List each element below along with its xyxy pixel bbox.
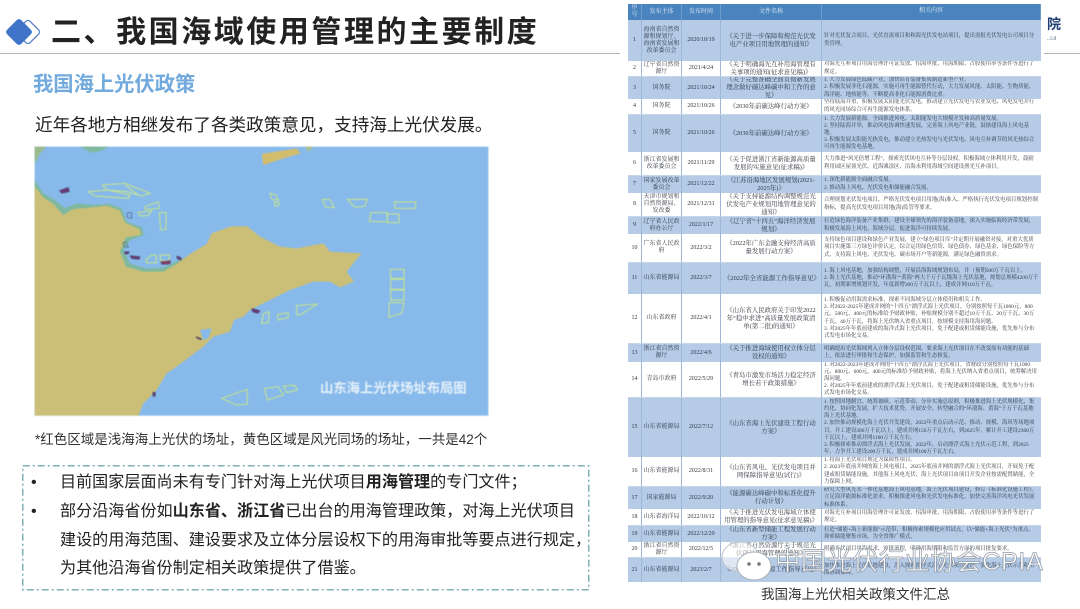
row 9: 《辽宁省“十四五”海洋经济发展规划》 <box>727 218 815 232</box>
row 16: 2022/8/31 <box>689 468 713 474</box>
row 9: 2022/1/17 <box>689 222 713 228</box>
table header: 发布时间 <box>689 8 713 14</box>
cropped small text top right: ..l.il <box>1047 36 1056 42</box>
section heading: 我国海上光伏政策 <box>33 74 195 96</box>
row 13: 2022/4/6 <box>690 350 712 356</box>
row 21: 山东省能源局 <box>643 566 680 572</box>
row 21 <box>628 558 1041 582</box>
bullet 1: • <box>31 473 37 491</box>
row 6: 《关于促进浙江省新能源高质量发展的实施意见(征求稿)》 <box>726 156 816 170</box>
header divider <box>0 53 620 54</box>
row 21: 21 <box>632 566 638 572</box>
row 7: 7 <box>633 181 636 187</box>
row 3: 2021/10/24 <box>687 84 715 90</box>
wechat watermark icon <box>722 542 772 580</box>
row 18: 18 <box>632 514 638 520</box>
row 5: 2. 坚持陆海并举，推动风电协调快速发展，完善海上风电产业链，鼓励建设海上风电基地。 <box>824 123 1029 136</box>
row 14: 2. 对2025年年底前建成的漂浮式海上光伏项目，免于配建或租赁储能设施，优先参与分布式发电市场化交易。 <box>824 383 1034 396</box>
row 7: 1. 深化新能源全面融合发展。 <box>824 177 894 183</box>
row 2: 对海光互补项目用海管理许可证发放、招海审批、用海期限、占股使用率等条件等进行了规定。 <box>824 61 1034 74</box>
row 14: 《青岛市激发市场活力稳定经济增长若干政策措施》 <box>726 372 816 386</box>
row 20: 浙江省自然资源厅 <box>643 542 680 556</box>
row 1 <box>628 20 1041 61</box>
table header: 文件名称 <box>759 9 783 15</box>
policy table <box>628 4 1041 582</box>
row 11: 2. 海上光伏基地，推动“环渤海”“黄海”两大千万千瓦级海上光伏基地，规划总规模4200万千瓦，初期新增规划开发，年度新增300万千瓦以上，建成并网110万千瓦。 <box>824 275 1038 288</box>
row 11: 11 <box>632 275 637 281</box>
row 15 <box>628 398 1041 457</box>
row 1: 海南省自然资源和规划厅、海南省发展和改革委员会 <box>643 26 680 54</box>
row 2: 2 <box>633 65 636 71</box>
red shallow-sea site markers <box>59 187 260 396</box>
row 16: 1. 将海上光伏项目规定为保障性项目。 <box>824 457 916 463</box>
row 4: 2021/10/26 <box>687 103 715 109</box>
row 8: 《关于支持能源结构调整规范光伏发电产业规划用地管理意见的通知》 <box>726 193 816 216</box>
row 12: 2. 对2022-2025年建成并网的“十四五”漂浮式海上光伏项目，分别按照每千瓦1000元、800元、500元、400元的标准给予财政补贴，补贴规模分别不超过10万千瓦、20万千瓦、30万千瓦、40万千瓦，将海上光伏纳入省重点项目，按规模支持海用海问题。 <box>824 304 1034 324</box>
row 18 <box>628 509 1041 526</box>
row 1: 《关于进一步保障和规范光伏发电产业项目用地管理的通知》 <box>726 32 816 48</box>
row 13: 明确提出光伏海域列入立体分层设权范围，要求海上光伏项目在不改变原有功能的基础上，依法进行审批和生态保护，加强监管和生态修复。 <box>824 346 1029 359</box>
row 14: 青岛市政府 <box>646 376 676 382</box>
row 4 <box>628 99 1041 115</box>
row 14: 2022/5/29 <box>689 376 713 382</box>
table header: 序号 <box>631 5 638 18</box>
header icon: double diamonds <box>6 19 40 45</box>
row 20: 明确光伏项目用海需求、审批流程，明确用海期限和监管方面的项目批复要求。 <box>824 546 1013 552</box>
row 15: 《山东省海上光伏建设工程行动方案》 <box>726 420 816 434</box>
row 19: 《山东省新型储能工程发展行动方案》 <box>726 526 816 541</box>
map label: 山东海上光伏场址布局图 <box>320 379 467 395</box>
row 4: 坚持陆海并重，积极发展太阳能光伏发电，推动建立光伏发电与农业发电、风电发电并行的风光同场综合可再生能源发电体系。 <box>824 99 1034 112</box>
row 5: 《2030年前碳达峰行动方案》 <box>729 130 813 136</box>
row 8: 2021/12/31 <box>687 201 715 207</box>
row 15: 3. 积极探索推动漂浮式海上光伏发展，2022年，启动漂浮式海上光伏示范工程，到2025年，力争开工建设200万千瓦，建成并网100万千瓦左右。 <box>824 442 1029 455</box>
row 17: 国家能源局 <box>646 494 676 500</box>
row 12: 《山东省人民政府关于印发2022年“稳中求进”高质量发展政策清单(第二批)的通知》 <box>726 306 816 330</box>
intro text: 近年各地方相继发布了各类政策意见，支持海上光伏发展。 <box>35 115 492 135</box>
row 6: 6 <box>633 160 636 166</box>
row 5: 2021/10/26 <box>687 130 715 136</box>
row 15: 2. 加快推动规模化海上光伏开发建设，2022年重点启动示范、推动、规模、海风等场地项目，开工建设300万千瓦以上，建成并网150万千瓦左右，到2025年，累计开工建设2300万千瓦以上，建成并网1100万千瓦左右。 <box>824 420 1034 441</box>
cropped logo text top right: 院 <box>1047 16 1061 32</box>
row 17: 研究大型风光水一体化基地海上风电基地，海上光伏项目建设，修订《标准化设施工程》。立足海洋能源标准化需求，积极推进风电和光伏发电标准化，加快完善海洋风电光伏发展标准体系。 <box>824 487 1037 508</box>
row 10: 2022/3/2 <box>690 244 712 250</box>
row 5: 国务院 <box>652 130 670 136</box>
row 7: 《江苏沿海地区发展规划(2021-2025年)》 <box>727 176 815 192</box>
table header: 相关内容 <box>919 8 943 14</box>
row 16: 2. 2023年底前并网的海上风电项目、2025年底前并网的漂浮式海上光伏项目，开展免于配建或租赁储能设施，其他海上风电光伏、海上光伏项目由项目开发企业按需配置储能，全力保障上网。 <box>824 464 1034 485</box>
row 5: 5 <box>633 130 636 136</box>
row 12 <box>628 294 1041 344</box>
row 11 <box>628 263 1041 294</box>
row 21: 2023/2/7 <box>690 566 712 572</box>
row 13: 浙江省自然资源厅 <box>643 346 680 359</box>
row 7: 国家发展改革委员会 <box>643 178 680 190</box>
yellow wind-solar site outlines <box>88 183 416 405</box>
row 1: 针对光伏复合项目、光伏直流项目和和海光伏发电站项目，提出需报光伏发电公司项目分类管理。 <box>824 33 1034 46</box>
row 14: 14 <box>632 376 638 382</box>
row 5: 1. 大力发展新能源，全面推进风电、太阳能发电大规模开发和高质量发展。 <box>824 116 1002 122</box>
bullet 2 text: 部分沿海省份如山东省、浙江省已出台的用海管理政策，对海上光伏项目 <box>60 502 575 520</box>
map: Shandong offshore PV sites <box>34 146 489 416</box>
row 12: 2022/4/1 <box>690 315 712 321</box>
bullet 2 text: 建设的用海范围、建设要求及立体分层设权下的用海审批等要点进行规定， <box>60 531 591 549</box>
row 17: 2022/9/20 <box>689 494 713 500</box>
row 8: 合理规划光伏发电项目、严格光伏发电项目用地(海)准入、严格执行光伏发电项目规划控制指标，提高光伏发电项目用地(海)监管等要求。 <box>824 197 1038 210</box>
row 16: 山东省能源局 <box>643 468 680 474</box>
row 4: 国务院 <box>652 103 670 109</box>
row 19 <box>628 526 1041 542</box>
row 14: 1. 对2022-2023年建成并网的“十四五”漂浮式海上光伏项目，省财政分别按照每千瓦1000元、800元、600元、400元的标准给予财政补贴，将海上光伏纳入省重点项目，统筹解决用海问题。 <box>824 362 1037 382</box>
row 16: 《山东省风电、光伏发电项目并网保障指导意见(试行)》 <box>726 464 816 478</box>
row 20 <box>628 542 1041 558</box>
row 3: 国务院 <box>652 84 670 90</box>
row 7: 2021/12/22 <box>687 181 715 187</box>
row 17 <box>628 487 1041 509</box>
callout: key findings <box>22 465 591 590</box>
row 1: 1 <box>633 37 636 43</box>
bullet 2: • <box>31 502 37 520</box>
map footnote: *红色区域是浅海海上光伏的场址，黄色区域是风光同场的场址，一共是42个 <box>35 432 487 447</box>
row 5 <box>628 115 1041 152</box>
bullet 2 text <box>60 502 591 577</box>
row 6: 浙江省发展和改革委员会 <box>643 156 680 170</box>
row 3: 3 <box>633 84 636 90</box>
row 15: 山东省能源局 <box>643 424 680 430</box>
row 12: 12 <box>632 315 638 321</box>
row 10: 10 <box>632 244 638 250</box>
row 11: 山东省能源局 <box>643 275 680 281</box>
row 13: 13 <box>632 350 638 356</box>
row 11: 1. 海上风电基地，加强结构调整，开展沿海海域规划布局，并（预期500万千瓦以上。 <box>824 268 1026 274</box>
row 15: 2022/7/12 <box>689 424 713 430</box>
row 11: 2022/3/7 <box>690 275 712 281</box>
right divider <box>1044 53 1080 54</box>
table caption: 我国海上光伏相关政策文件汇总 <box>761 587 950 602</box>
row 19: 2022/12/29 <box>687 530 715 536</box>
row 3: 1. 大力发展绿色低碳产业，加快培育装备集成制造新型产业。 <box>824 77 970 83</box>
row 17: 《能源碳达峰碳中和标准化提升行动计划》 <box>726 490 816 505</box>
row 21: 《2023年全省能源工作指导意见》 <box>724 566 820 573</box>
row 12: 1. 积极促动用海需求标准，探索不同海域分层立体使用和相关工作。 <box>824 297 986 303</box>
row 4: 《2030年前碳达峰行动方案》 <box>729 102 813 110</box>
row 16 <box>628 457 1041 487</box>
row 18: 《关于推进光伏发电海域立体使用管理的指导意见(征求意见稿)》 <box>724 509 818 524</box>
row 20: 2022/12/5 <box>689 546 713 552</box>
row 6: 大力推进“风光倍增工程”，探索光伏风电互补等分层设权，积极海域立体利用开发，鼓励利用园区屋顶光伏、近海滩涂区、沿海未利用海域空间建设渔光互补项目。 <box>824 156 1034 170</box>
title: 二、我国海域使用管理的主要制度 <box>51 16 539 49</box>
bullet 2 text: 为其他沿海省份制定相关政策提供了借鉴。 <box>60 559 366 577</box>
row 7 <box>628 176 1041 193</box>
row 17: 17 <box>632 494 638 500</box>
row 20: 20 <box>632 546 638 552</box>
row 9: 辽宁省人民政府办公厅 <box>643 218 680 232</box>
row 12: 山东省政府 <box>646 315 676 321</box>
row 8 <box>628 193 1041 217</box>
row 12: 3. 对2025年年底前建成的海洋式海上光伏项目，免于配建或租赁储能设施，优先参与分布式发电市场化交易。 <box>824 326 1034 339</box>
row 1: 2020/10/19 <box>687 37 715 43</box>
row 8: 8 <box>633 201 636 207</box>
row 6 <box>628 152 1041 176</box>
row 9 <box>628 217 1041 234</box>
watermark text: 中国光伏行业协会CPIA <box>775 548 1043 576</box>
row 5: 3. 积极发展太阳能光热发电，推动建立光热发电与光伏发电、风电互补调节的风光热综合可再生能源发电基地。 <box>824 137 1034 150</box>
row 15: 15 <box>632 424 638 430</box>
row 10: 支持绿色项目建设和绿色产业发展，建立“绿色项目库”并定期开展融资对接，对重大优质项目实施第三方绿色评价认定，综合运用绿色信贷、绿色债券、绿色基金、绿色保险等方式，支持海上风电、光伏发电、碳市场开户等新能源，满足绿色融资需求。 <box>824 237 1034 258</box>
row 9: 9 <box>633 222 636 228</box>
table header <box>628 4 1041 20</box>
row 11: 《2022年全省能源工作指导意见》 <box>724 274 820 282</box>
row 18: 对海光互补项目用海管理许可证发放、招海审批、用海期限、占股使用率等条件等进行了规定。 <box>824 510 1034 523</box>
table header: 发布主体 <box>649 8 674 14</box>
row 10: 广东省人民政府 <box>643 241 680 254</box>
row 19: 打造“储能+海上新能源”示范带，积极探索规模化应用试点，以“储能+海上光伏”为重点，探索储能聚集市场、为全省推广模式。 <box>824 527 1034 540</box>
row 2: 2021/4/24 <box>689 65 713 71</box>
row 18: 山东省海洋局 <box>643 514 680 520</box>
row 13 <box>628 344 1041 362</box>
row 6: 2021/11/29 <box>687 160 715 166</box>
bullet 1 text: 目前国家层面尚未有专门针对海上光伏项目用海管理的专门文件； <box>60 473 527 491</box>
row 19: 山东省能源局 <box>643 530 680 536</box>
row 4: 4 <box>633 103 636 109</box>
row 13: 《关于推进海域使用权立体分层设权的通知》 <box>726 345 816 360</box>
row 10 <box>628 234 1041 263</box>
row 14 <box>628 362 1041 398</box>
row 7: 2. 推动海上风电、光伏发电和储能融合发展。 <box>824 184 932 190</box>
row 2: 辽宁省自然资源厅 <box>643 62 680 74</box>
row 10: 《2022年广东金融支持经济高质量发展行动方案》 <box>726 240 816 255</box>
row 3: 2. 积极发展非化石能源，实施可再生能源替代行动，大力发展风能、太阳能、生物质能、海洋能、地热能等，不断提高非化石能源消费比重。 <box>824 84 1034 98</box>
row 21: 加快推进海上光伏基地建设，深入探索漂浮式海上光伏项目建设，强化海上光伏示范和用海协调保障。 <box>824 563 1034 576</box>
row 15: 1. 按照因地制宜、统筹兼顾、示范带动、分步实施总原则，积极推进海上光伏规模化、集约化、协同化发展，扩大技术优势，开展安全、转型融合的“环渤海、黄海”千万千瓦基地海上光伏基地。 <box>824 399 1034 419</box>
row 9: 打造绿色海洋装备产业集群，建设全球领先的海洋装备基地，深入实施临海经济带发展，积极发展海上风电、海域分层，促进海洋可持续发展。 <box>824 218 1034 232</box>
row 18: 2022/10/12 <box>687 514 715 520</box>
row 16: 16 <box>632 468 638 474</box>
row 19: 19 <box>632 530 638 536</box>
row 3 <box>628 77 1041 99</box>
row 2 <box>628 61 1041 77</box>
row 8: 天津市规划和自然资源局、发改委 <box>643 194 680 214</box>
